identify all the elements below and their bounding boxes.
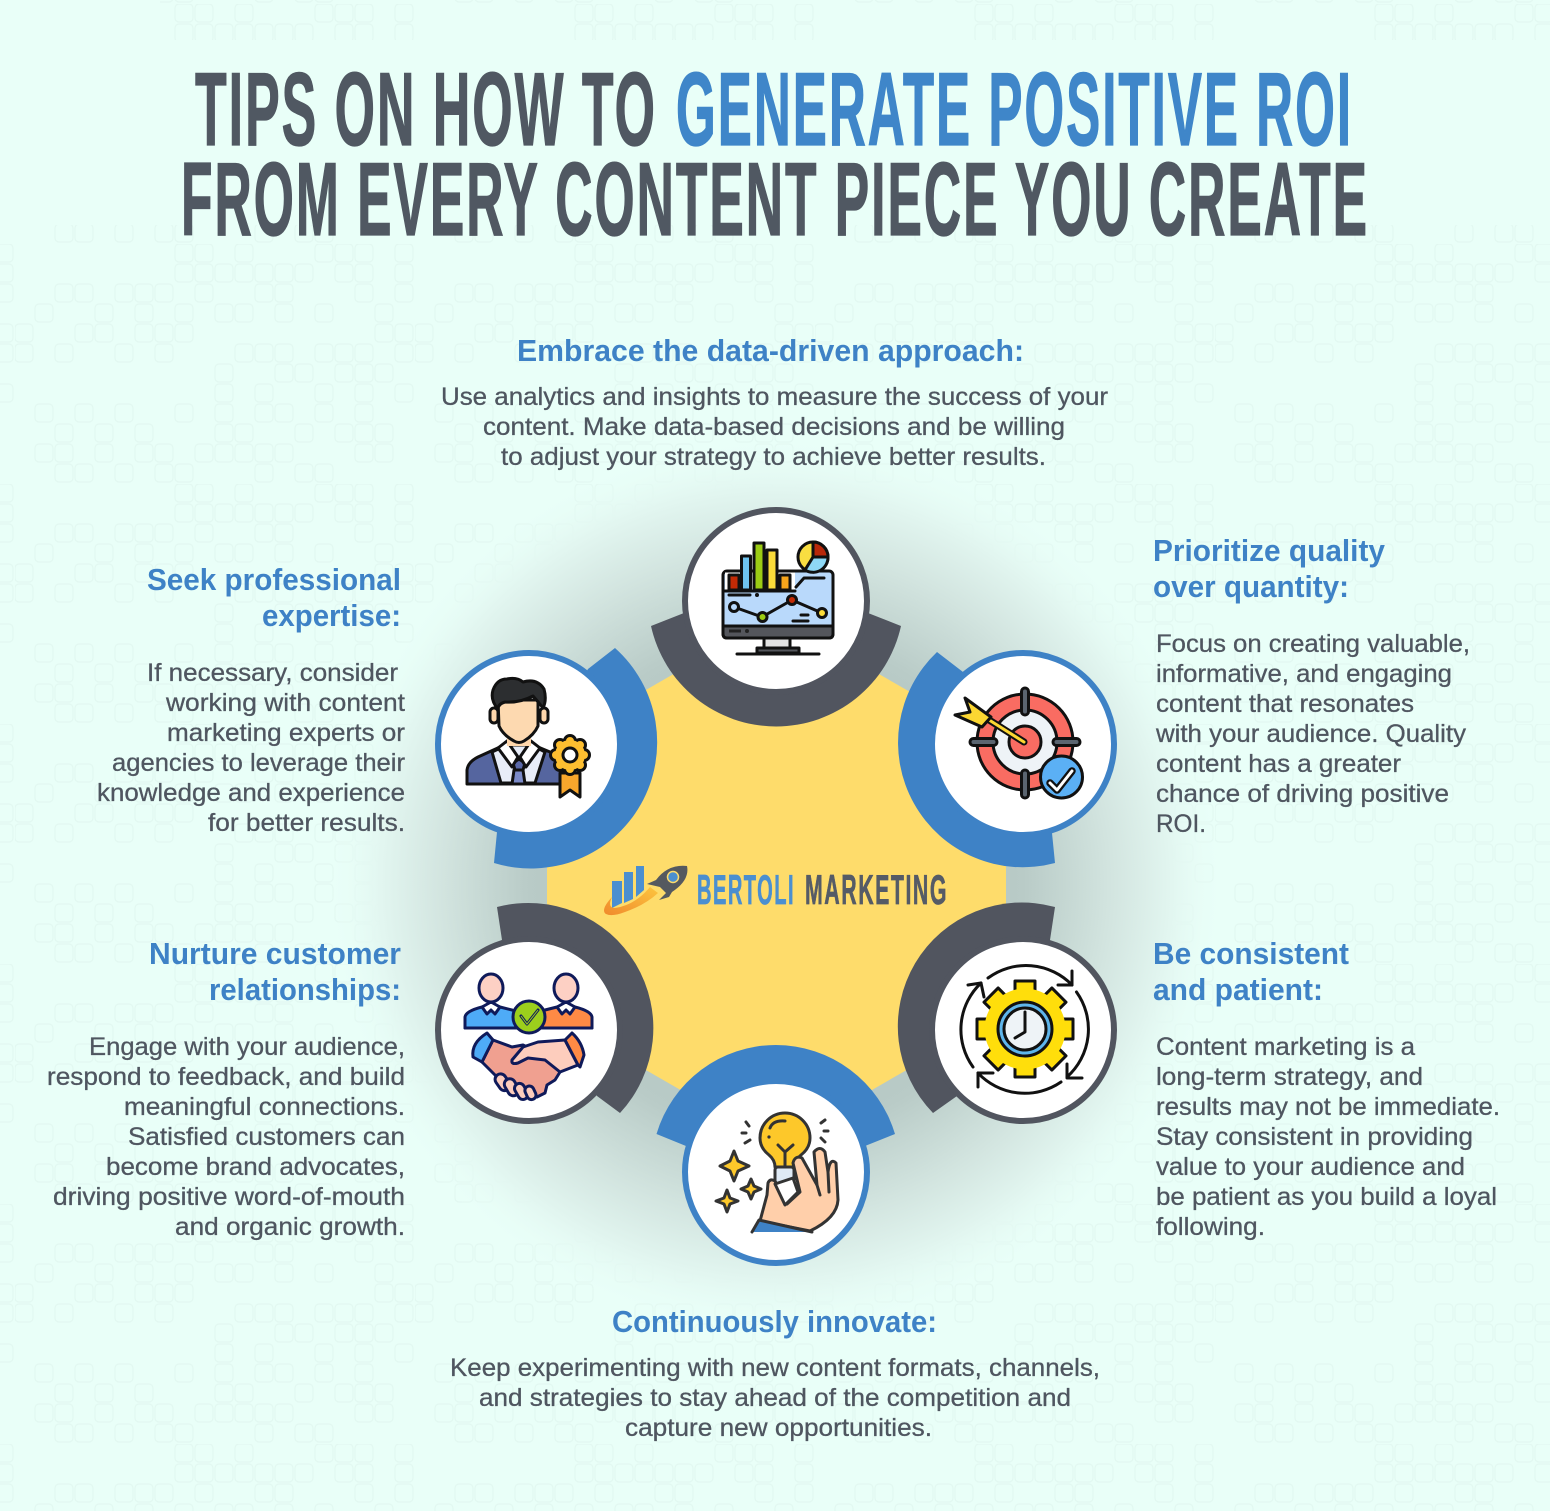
text block: Prioritize quality over quantity xyxy=(1153,533,1470,838)
text block: Continuously innovate: and strategies to stay ahead of the competition and xyxy=(479,1384,1071,1412)
text block: Be consistent and patient: and patient: xyxy=(1153,972,1323,1007)
text block: Be consistent and patient: long-term strategy, and xyxy=(1156,1063,1423,1091)
icon: professional with award badge xyxy=(467,678,590,797)
text block: Seek professional expertise: knowledge and experience xyxy=(97,779,405,807)
text block: Prioritize quality over quantity: Prioritize quality xyxy=(1153,533,1386,568)
icon: analytics monitor xyxy=(723,542,833,654)
text block: Prioritize quality over quantity: informative, and engaging xyxy=(1156,660,1452,688)
text block: Seek professional expertise xyxy=(97,562,405,837)
crescent: lower left dark xyxy=(497,903,653,1113)
text block: Be consistent and patient: Stay consistent in providing xyxy=(1156,1123,1473,1151)
text block: Be consistent and patient: Content marketing is a xyxy=(1156,1033,1415,1061)
icon: target with arrow and check xyxy=(955,688,1082,798)
text block: Continuously innovate: capture new opportunities. xyxy=(625,1414,932,1442)
text block: Prioritize quality over quantity: over quantity: xyxy=(1153,569,1349,604)
title xyxy=(181,52,1369,258)
text block: Nurture customer relationships: Satisfied customers can xyxy=(128,1123,405,1151)
icon: handshake and two people xyxy=(465,974,592,1101)
central yellow hexagon xyxy=(547,615,1006,1145)
text block: Be consistent and patient: be patient as you build a loyal xyxy=(1156,1183,1497,1211)
crescent: top dark xyxy=(651,613,901,726)
text block: Nurture customer relationships: Engage with your audience, xyxy=(89,1033,405,1061)
title: TIPS ON HOW TO xyxy=(195,52,657,168)
soft shadow behind the wheel xyxy=(326,435,1226,1335)
icon: light bulb in hand with sparkles xyxy=(716,1113,838,1232)
crescent: left blue xyxy=(494,648,657,869)
text block: Nurture customer relationships: respond to feedback, and build xyxy=(47,1063,405,1091)
logo: Bertoli Marketing: MARKETING xyxy=(805,866,948,913)
text block: Nurture customer relationships: become brand advocates, xyxy=(106,1153,405,1181)
logo: Bertoli Marketing xyxy=(604,866,948,915)
text block: Embrace the data-driven approach: content. Make data-based decisions and be willing xyxy=(483,413,1065,441)
text block: Seek professional expertise: If necessary, consider xyxy=(147,659,398,687)
text block: Seek professional expertise: for better results. xyxy=(208,809,405,837)
text block: Be consistent and patient: value to your audience and xyxy=(1156,1153,1465,1181)
circle: lower left xyxy=(438,939,620,1121)
text block: Be consistent and patient xyxy=(1153,936,1500,1241)
crescent: lower right dark xyxy=(898,902,1055,1113)
text block: Prioritize quality over quantity: content has a greater xyxy=(1156,750,1401,778)
circle: right xyxy=(932,653,1114,835)
text block: Embrace the data-driven approach: Embrace the data-driven approach: xyxy=(517,333,1024,368)
text block: Be consistent and patient: Be consistent xyxy=(1153,936,1349,971)
text block: Be consistent and patient: results may not be immediate. xyxy=(1156,1093,1500,1121)
crescent: bottom blue xyxy=(656,1045,895,1146)
circle: lower right xyxy=(932,939,1114,1121)
text block: Nurture customer relationships: meaningful connections. xyxy=(124,1093,405,1121)
text block: Embrace the data-driven approach: Use analytics and insights to measure the success of your xyxy=(441,383,1108,411)
circle: left xyxy=(438,653,620,835)
text block: Prioritize quality over quantity: with your audience. Quality xyxy=(1155,720,1467,748)
circle: bottom xyxy=(685,1081,867,1263)
text block: Nurture customer relationships: and organic growth. xyxy=(175,1213,405,1241)
text block: Seek professional expertise: Seek professional xyxy=(147,562,401,597)
text block: Nurture customer relationships: Nurture customer xyxy=(149,936,401,971)
icon: gear with clock and cycle arrows xyxy=(961,965,1088,1093)
text block: Nurture customer relationships: relationships: xyxy=(209,972,401,1007)
text block: Seek professional expertise: marketing experts or xyxy=(167,719,405,747)
text block: Seek professional expertise: agencies to leverage their xyxy=(112,749,405,777)
text block: Continuously innovate xyxy=(450,1304,1100,1442)
text block: Prioritize quality over quantity: content that resonates xyxy=(1156,690,1414,718)
text block: Seek professional expertise: expertise: xyxy=(262,598,401,633)
text block: Prioritize quality over quantity: chance of driving positive xyxy=(1156,780,1449,808)
text block: Seek professional expertise: working with content xyxy=(165,689,405,717)
text block: Embrace the data-driven approach: to adjust your strategy to achieve better results. xyxy=(501,443,1046,471)
text block: Nurture customer relationships: driving positive word-of-mouth xyxy=(53,1183,405,1211)
text block: Prioritize quality over quantity: Focus on creating valuable, xyxy=(1156,630,1470,658)
logo: Bertoli Marketing: BERTOLI xyxy=(697,866,795,913)
text block: Prioritize quality over quantity: ROI. xyxy=(1156,810,1206,838)
text block: Be consistent and patient: following. xyxy=(1156,1213,1265,1241)
text block: Continuously innovate: Continuously innovate: xyxy=(612,1304,937,1339)
text block: Continuously innovate: Keep experimenting with new content formats, channels, xyxy=(450,1354,1100,1382)
crescent: right blue xyxy=(898,652,1055,867)
text block: Nurture customer relationships xyxy=(47,936,405,1241)
circle: top xyxy=(685,510,867,692)
text block: Embrace the data-driven approach xyxy=(441,333,1108,471)
